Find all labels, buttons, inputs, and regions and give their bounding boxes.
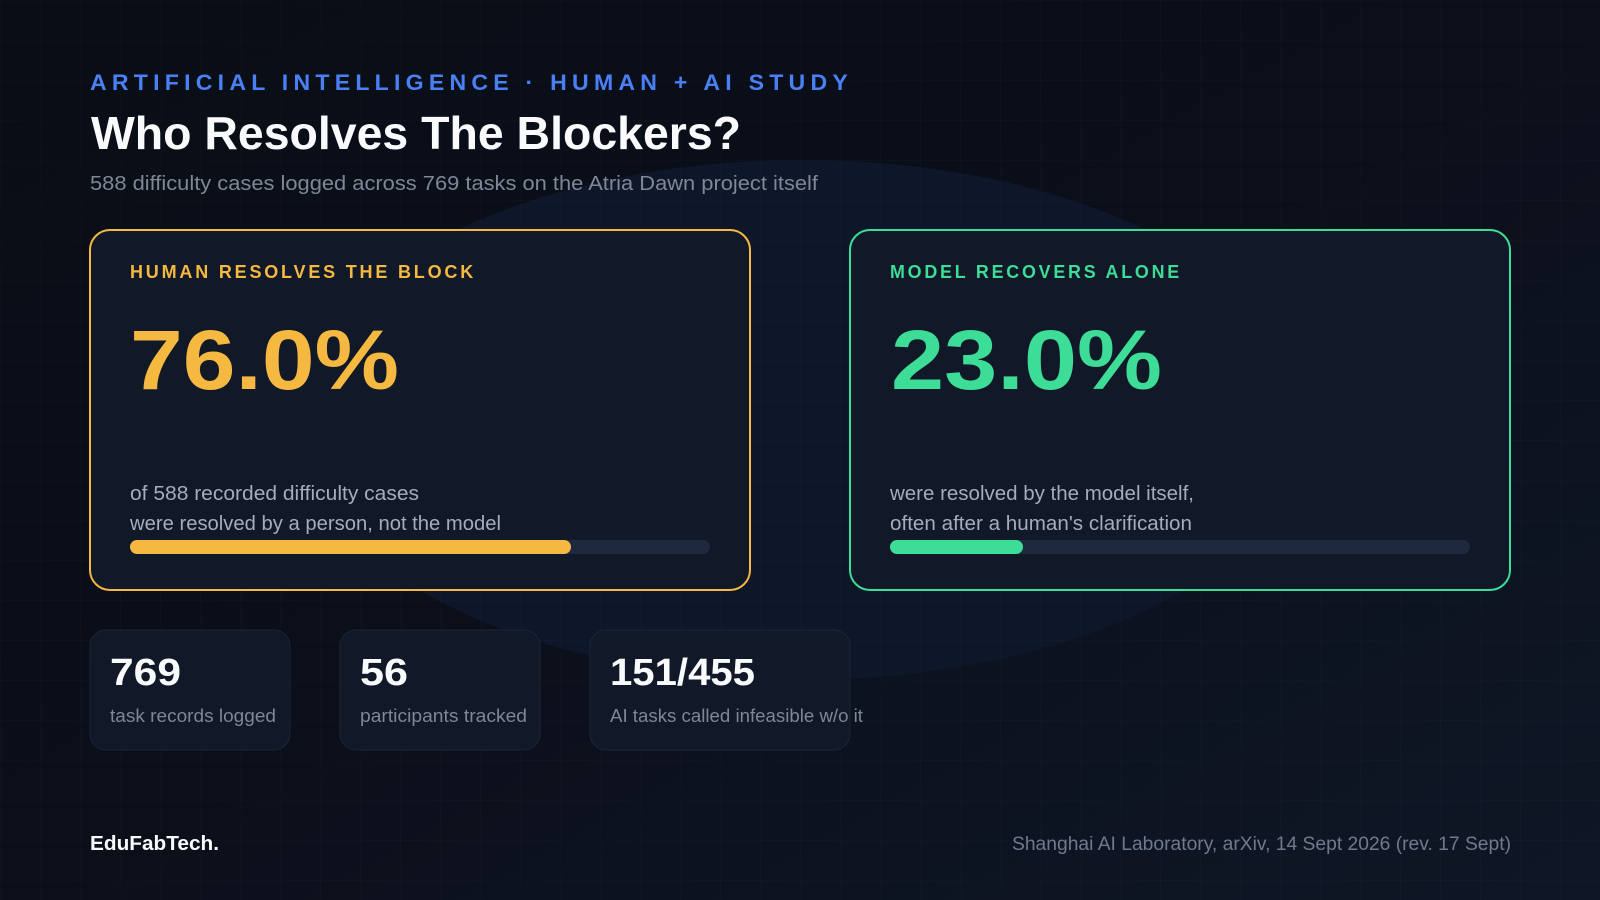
panel label: human: HUMAN RESOLVES THE BLOCK	[130, 262, 476, 282]
title: Who Resolves The Blockers?	[91, 107, 741, 159]
header eyebrow: ARTIFICIAL INTELLIGENCE · HUMAN + AI STUDY	[90, 70, 853, 95]
description: human: were resolved by a person, not the model	[129, 513, 501, 535]
footer brand: EduFabTech.	[90, 833, 219, 855]
panel label: model: MODEL RECOVERS ALONE	[890, 262, 1182, 282]
stat: infeasible tasks	[590, 630, 863, 750]
footer source: Shanghai AI Laboratory, arXiv, 14 Sept 2026 (rev. 17 Sept)	[1012, 834, 1511, 855]
stat: task records	[90, 630, 290, 750]
description: model	[889, 483, 1194, 535]
panel: model recovers alone	[850, 230, 1510, 590]
big number: 76.0%: 76.0%	[130, 313, 399, 407]
stat: task records: 769	[110, 652, 181, 694]
stat: participants	[340, 630, 540, 750]
stat: participants: participants tracked	[360, 706, 527, 726]
big number: 23.0%: 23.0%	[891, 313, 1162, 407]
stat: infeasible tasks: 151/455	[610, 652, 755, 694]
description: model: were resolved by the model itself,	[889, 483, 1194, 505]
stat: task records: task records logged	[110, 706, 276, 726]
panel: human resolves the block	[90, 230, 750, 590]
stat: participants: 56	[360, 652, 408, 694]
subtitle: 588 difficulty cases logged across 769 tasks on the Atria Dawn project itself	[90, 173, 818, 195]
progress bar: 76%	[130, 540, 710, 554]
description: human: of 588 recorded difficulty cases	[130, 483, 419, 505]
progress bar: 23%	[890, 540, 1470, 554]
stat: infeasible tasks: AI tasks called infeasible w/o it	[610, 706, 863, 726]
description: model: often after a human's clarification	[890, 513, 1192, 535]
description: human	[129, 483, 501, 535]
